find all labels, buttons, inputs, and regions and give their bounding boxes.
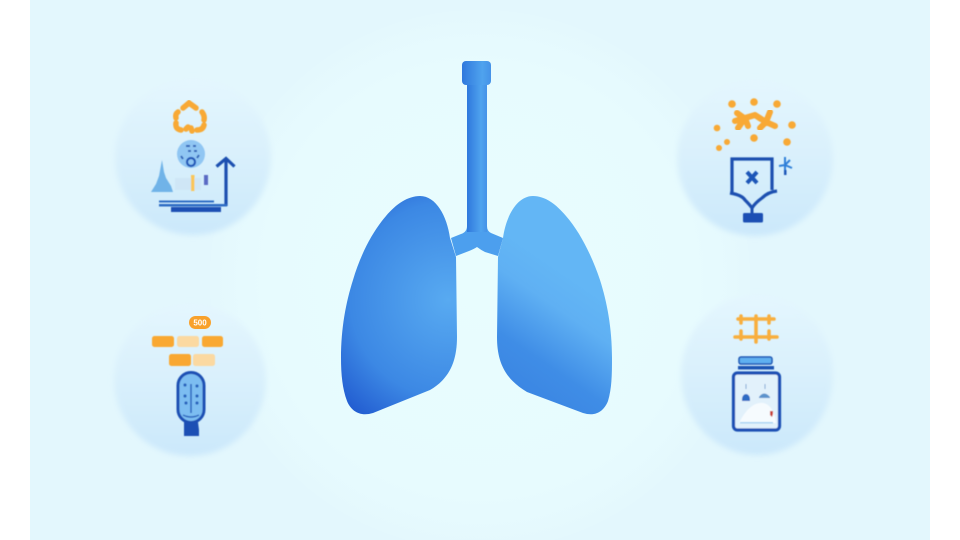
right lung [497,196,612,414]
icon: orange particles [714,98,796,151]
panel: top left circle [115,79,271,235]
icon: jar body [734,373,780,430]
panel: bottom left circle [114,304,266,456]
left lung [341,196,457,414]
icon: jar lid [738,357,774,370]
icon: pale box with orange bar [175,175,208,191]
bronchi [451,226,503,256]
icon: orange blocks [152,336,223,366]
icon: orange branching frame [735,316,777,342]
icon: blue microscope disc [177,140,205,168]
badge: orange pill: 500 [193,318,207,328]
icon: rising arrow and base [159,158,234,212]
icon: orange ring cluster [176,103,204,131]
icon: shield funnel with cross [730,159,777,222]
panel: bottom right circle [681,295,833,455]
panel: top right circle [677,80,833,236]
icon: orange bronchi cluster [735,112,775,128]
trachea [467,82,487,232]
icon: light blue flask [151,160,173,192]
lungs illustration [341,61,612,414]
icon: blue bottle [178,372,204,436]
icon: small blue fan [779,157,792,175]
trachea cap [462,61,491,85]
badge: orange pill [189,316,211,329]
